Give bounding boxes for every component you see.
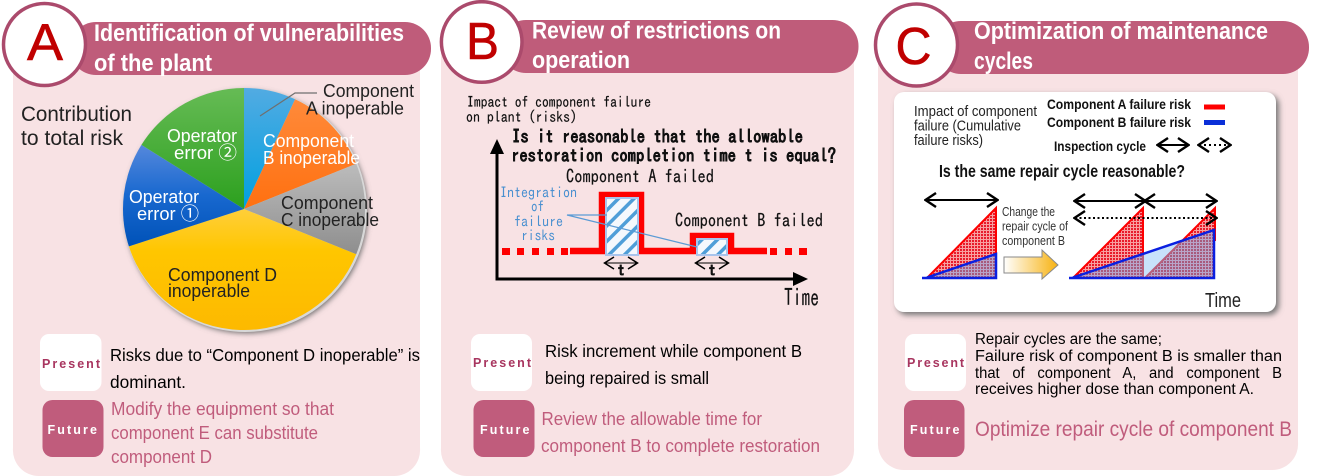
present text A: dominant. xyxy=(110,372,186,392)
panel A letter badge xyxy=(4,4,86,86)
present text C: Repair cycles are the same; xyxy=(975,331,1162,348)
panel A heading: Identification of vulnerabilities xyxy=(94,20,404,47)
chart question xyxy=(511,128,836,165)
change repair cycle label: Change the xyxy=(1002,205,1055,219)
change repair cycle label xyxy=(1002,205,1068,248)
pie labels: A inoperable xyxy=(306,98,404,118)
pie labels: B inoperable xyxy=(263,148,360,168)
panel B heading xyxy=(532,18,781,74)
future text B: component B to complete restoration xyxy=(541,436,820,456)
future text C: Optimize repair cycle of component B xyxy=(975,418,1292,441)
present tag C: Present xyxy=(907,356,965,370)
chart label: contribution to total risk xyxy=(21,103,132,150)
present tag A xyxy=(40,334,102,391)
panel C letter badge: C xyxy=(896,18,932,76)
future text A: component E can substitute xyxy=(111,423,318,443)
panel A background xyxy=(13,40,420,476)
y axis label xyxy=(914,104,1037,149)
chart card: repair cycle comparison xyxy=(894,92,1279,315)
future tag C xyxy=(904,400,964,457)
y axis label: failure risks) xyxy=(914,133,983,149)
change repair cycle label: component B xyxy=(1002,234,1065,248)
present text C: Failure risk of component B is smaller than xyxy=(975,348,1282,365)
pie labels: Operator xyxy=(167,126,237,146)
pie labels: inoperable xyxy=(168,281,250,301)
y axis label: failure (Cumulative xyxy=(914,118,1021,134)
pie labels: Component D xyxy=(168,265,277,285)
present text C: receives higher dose than component A. xyxy=(975,381,1254,398)
y axis label xyxy=(466,94,651,124)
future tag A: Future xyxy=(48,423,97,437)
future text A xyxy=(111,399,334,467)
panel: A identification of vulnerabilities xyxy=(4,4,431,476)
future text B: Review the allowable time for xyxy=(542,409,762,429)
panel B letter badge xyxy=(441,2,522,82)
pie labels: Component xyxy=(323,81,414,101)
legend xyxy=(1047,96,1230,154)
risk line xyxy=(502,195,807,255)
time span arrows: t xyxy=(617,262,625,278)
panel C heading xyxy=(974,18,1268,75)
panel C letter badge xyxy=(876,4,958,86)
present text B: being repaired is small xyxy=(545,368,709,388)
pie labels: error ② xyxy=(174,143,237,163)
present text C: that of component A, and component B xyxy=(975,365,1282,382)
integration of failure risks label xyxy=(500,184,577,243)
transition arrow xyxy=(1004,250,1058,279)
series labels: Component A failed xyxy=(566,168,714,186)
panel C heading: Optimization of maintenance xyxy=(974,18,1268,45)
panel A heading xyxy=(94,20,404,77)
present text B: Risk increment while component B xyxy=(545,341,802,361)
chart question: restoration completion time t is equal? xyxy=(511,146,836,165)
legend: Inspection cycle xyxy=(1054,138,1146,154)
y axis label: Impact of component xyxy=(914,104,1037,120)
present text A xyxy=(110,345,420,392)
y axis label: on plant (risks) xyxy=(466,109,577,124)
future text B xyxy=(541,409,820,456)
integration of failure risks label: failure xyxy=(514,213,563,229)
axes xyxy=(490,139,808,286)
chart question: Is the same repair cycle reasonable? xyxy=(939,161,1185,181)
future text A: component D xyxy=(111,447,212,467)
panel C background xyxy=(878,40,1298,470)
panel A header bar xyxy=(70,22,431,75)
panel B heading: Review of restrictions on xyxy=(532,18,781,44)
present tag B xyxy=(471,334,532,391)
panel B letter badge: B xyxy=(466,13,499,71)
chart label: contribution to total risk: Contribution xyxy=(21,103,132,126)
time span arrows xyxy=(605,262,728,278)
future tag A xyxy=(42,400,104,457)
legend: Component A failure risk xyxy=(1047,96,1191,112)
x axis label: Time xyxy=(784,285,819,309)
panel C header bar xyxy=(935,21,1309,74)
integration of failure risks label: Integration xyxy=(500,184,577,200)
leader line for component A xyxy=(260,93,317,116)
present text B xyxy=(545,341,802,388)
legend: Component B failure risk xyxy=(1047,114,1191,130)
pie chart: contribution to total risk xyxy=(123,81,414,333)
present text C xyxy=(975,331,1282,398)
right chart: optimized repair cycle xyxy=(1069,201,1216,278)
future tag B xyxy=(474,400,534,457)
present tag A: Present xyxy=(42,357,101,371)
pie labels: Operator xyxy=(129,187,199,207)
panel: B review of restrictions xyxy=(441,2,858,476)
panel: C optimization of maintenance cycles xyxy=(876,4,1309,470)
panel A heading: of the plant xyxy=(94,50,212,77)
series labels xyxy=(566,168,823,230)
series labels: Component B failed xyxy=(675,212,823,230)
present text A: Risks due to “Component D inoperable” is xyxy=(110,345,420,365)
panel A letter badge: A xyxy=(27,14,63,72)
integration leader lines xyxy=(567,215,697,247)
left chart: same repair cycle xyxy=(922,200,997,278)
line chart: impact of component failure over time xyxy=(466,94,836,309)
pie labels: C inoperable xyxy=(281,210,379,230)
time span arrows: t xyxy=(708,262,716,278)
x axis label: Time xyxy=(1205,290,1241,312)
integration of failure risks label: risks xyxy=(521,227,555,243)
change repair cycle label: repair cycle of xyxy=(1002,220,1068,234)
chart question: Is it reasonable that the allowable xyxy=(512,128,803,146)
integration of failure risks label: of xyxy=(531,198,544,214)
pie labels: error ① xyxy=(137,204,199,224)
pie labels: Component xyxy=(281,193,373,213)
panel B heading: operation xyxy=(532,47,630,74)
present tag B: Present xyxy=(473,356,532,370)
chart label: contribution to total risk: to total risk xyxy=(21,127,123,150)
panel B header bar xyxy=(500,20,858,73)
pie labels: Component xyxy=(263,131,354,151)
y axis label: Impact of component failure xyxy=(467,94,651,109)
future tag B: Future xyxy=(480,423,530,437)
hatched failure-risk areas xyxy=(606,198,727,255)
future tag C: Future xyxy=(910,423,960,437)
future text A: Modify the equipment so that xyxy=(111,399,334,419)
present tag C xyxy=(905,334,966,391)
panel B background xyxy=(441,40,854,476)
pie labels xyxy=(129,81,414,301)
panel C heading: cycles xyxy=(974,48,1033,75)
